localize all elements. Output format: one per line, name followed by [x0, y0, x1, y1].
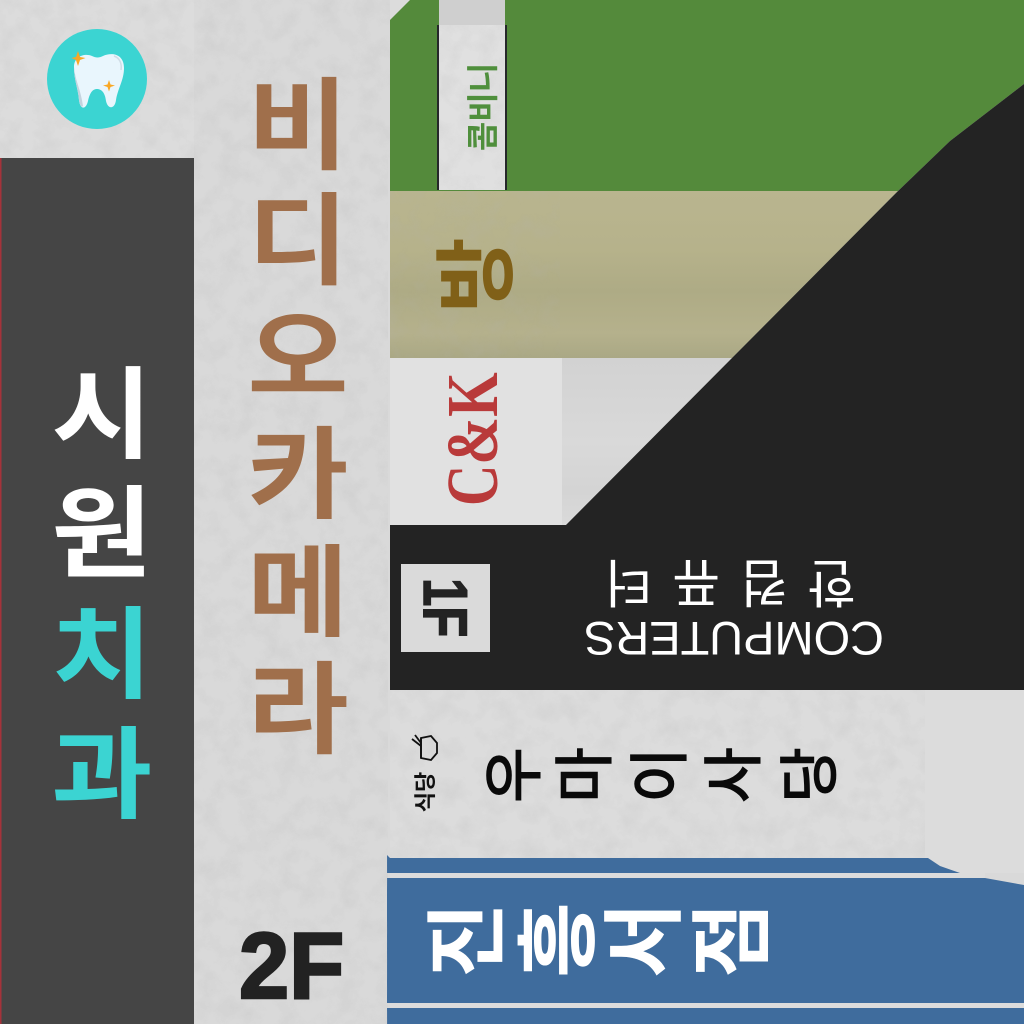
panel: black sign: [390, 84, 1024, 690]
panel: tan sign: [390, 191, 898, 358]
panel: C&K plate: [390, 358, 562, 525]
sign text: 우마이사당: 우: [466, 747, 553, 803]
heading: 비디오카메라: 메: [247, 513, 349, 657]
sign text: 진흥서점: 서: [578, 902, 697, 978]
label: 1F plate: 1F: [410, 578, 479, 637]
heading: 비디오카메라: 비: [247, 46, 349, 190]
sign text: 방: 방: [410, 237, 529, 313]
panel: concrete column: [194, 0, 390, 1024]
heading: 비디오카메라: 라: [247, 630, 349, 774]
sign text: 진흥서점: 점: [666, 902, 785, 978]
heading: 비디오카메라: 카: [247, 395, 349, 539]
heading: 비디오카메라: 오: [247, 278, 349, 422]
sign text: 우마이사당: [466, 747, 849, 803]
sign text: 콤비니: 콤비니: [458, 63, 504, 151]
sign text: 한컴퓨터: 한컴퓨터: [584, 549, 856, 624]
heading: 시원치과: [51, 335, 153, 839]
panel: lower concrete sign: [390, 690, 1024, 860]
sign text: C&K: C&K: [434, 372, 514, 506]
sign text: 우마이사당: 사: [686, 747, 773, 803]
sign text: 식당: 식당: [408, 772, 440, 812]
heading: 비디오카메라: [247, 46, 349, 774]
icon: tooth badge: [47, 29, 147, 129]
panel: dark sidebar: [0, 158, 194, 1024]
sign text: 우마이사당: 당: [762, 747, 849, 803]
panel: light grey sign: [390, 358, 732, 525]
label: 2F: 2F: [239, 913, 344, 1018]
sign text: COMPUTERS: COMPUTERS: [584, 612, 884, 665]
heading: 시원치과: 시: [51, 335, 153, 479]
label: 1F plate: [401, 564, 490, 652]
sign text: 우마이사당: 마: [537, 747, 624, 803]
sign text: 우마이사당: 이: [612, 747, 699, 803]
heading: 시원치과: 원: [51, 454, 153, 598]
panel: blue sign: [387, 855, 1024, 1024]
heading: 비디오카메라: 디: [247, 161, 349, 305]
sign text: 진흥서점: 흥: [492, 902, 611, 978]
sign text: 진흥서점: [401, 902, 785, 978]
heading: 시원치과: 치: [51, 575, 153, 719]
icon: rice bowl: [412, 735, 437, 760]
heading: 시원치과: 과: [51, 695, 153, 839]
panel: concrete strip on green sign: [437, 0, 507, 190]
panel: green sign: [390, 0, 1024, 191]
sign text: 진흥서점: 진: [401, 902, 520, 978]
